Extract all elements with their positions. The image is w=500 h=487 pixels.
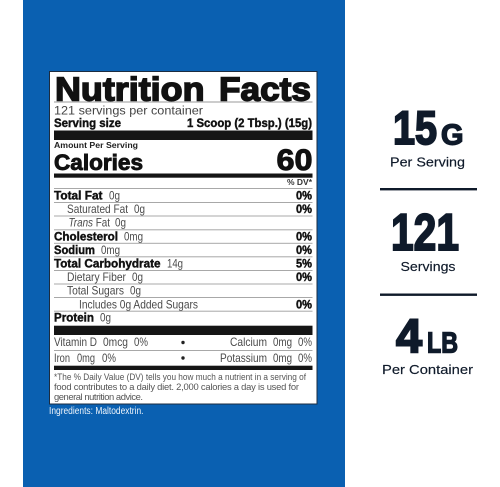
vitamins and minerals: 0mg bbox=[273, 335, 292, 349]
serving size: Serving size bbox=[54, 117, 122, 130]
vitamins and minerals: Potassium bbox=[220, 351, 267, 365]
vitamins and minerals: Iron bbox=[54, 351, 70, 365]
nutrient rows: 5% bbox=[296, 258, 312, 271]
vitamins and minerals: Vitamin D bbox=[54, 335, 97, 349]
nutrient rows: 0% bbox=[296, 230, 312, 243]
vitamins and minerals: 0% bbox=[102, 351, 116, 365]
footnote: *The % Daily Value (DV) tells you how much a nutrient in a serving of bbox=[54, 371, 306, 382]
vitamins and minerals: 0mcg bbox=[103, 335, 128, 349]
panel: nutrition facts label bbox=[50, 70, 317, 404]
calories: 60 bbox=[276, 144, 312, 177]
heading: Nutrition Facts: Nutrition bbox=[55, 70, 204, 108]
stat: 15g per serving: 15 bbox=[393, 101, 437, 154]
vitamins and minerals: 0% bbox=[134, 335, 148, 349]
amount per serving: Amount Per Serving bbox=[54, 141, 138, 150]
stat: 4lb per container: 4 bbox=[396, 309, 422, 362]
calories bbox=[54, 144, 312, 177]
serving size bbox=[54, 117, 312, 130]
vitamins and minerals: 0mg bbox=[77, 351, 95, 365]
nutrient rows: 0g bbox=[109, 188, 120, 202]
stat: 4lb per container bbox=[382, 309, 473, 377]
vitamins and minerals: Calcium bbox=[230, 335, 267, 349]
divider line bbox=[380, 294, 477, 296]
stat: 15g per serving bbox=[390, 101, 465, 170]
servings per container: 121 servings per container bbox=[54, 104, 203, 118]
nutrient rows: 0% bbox=[296, 203, 312, 216]
vitamins and minerals: 0% bbox=[298, 351, 312, 365]
footnote: general nutrition advice. bbox=[54, 391, 143, 402]
heading: Nutrition Facts bbox=[55, 70, 311, 108]
percent daily value header: % DV* bbox=[287, 178, 313, 187]
nutrient rows: 0g bbox=[100, 311, 111, 325]
stat: 121 servings: Servings bbox=[400, 260, 456, 274]
nutrient rows: 14g bbox=[167, 257, 183, 271]
stat: 121 servings: 121 bbox=[391, 204, 459, 262]
nutrient rows: 0mg bbox=[124, 229, 143, 243]
calories: Calories bbox=[54, 150, 143, 175]
nutrient rows: 0% bbox=[296, 244, 312, 257]
divider line bbox=[380, 188, 477, 190]
vitamins and minerals: 0mg bbox=[273, 351, 292, 365]
footnote: food contributes to a daily diet. 2,000 calories a day is used for bbox=[54, 381, 299, 392]
stat: 15g per serving: G bbox=[441, 119, 464, 151]
serving size: 1 Scoop (2 Tbsp.) (15g) bbox=[187, 117, 312, 130]
nutrient rows bbox=[54, 188, 312, 325]
stat: 4lb per container: LB bbox=[427, 327, 458, 359]
nutrient rows: 0% bbox=[296, 298, 312, 311]
nutrient rows: 0% bbox=[296, 189, 312, 202]
nutrient rows: Total Carbohydrate bbox=[54, 258, 161, 271]
nutrient rows: 0g bbox=[115, 216, 126, 230]
nutrient rows: 0g bbox=[134, 202, 145, 216]
nutrient rows: 0% bbox=[296, 271, 312, 284]
nutrient rows: 0g bbox=[132, 270, 143, 284]
nutrient rows: Cholesterol bbox=[54, 230, 118, 243]
vitamins and minerals: 0% bbox=[298, 335, 312, 349]
heading: Nutrition Facts: Facts bbox=[219, 70, 311, 108]
vitamins and minerals bbox=[54, 335, 312, 365]
nutrient rows: Saturated Fat bbox=[67, 202, 129, 216]
nutrient rows: Protein bbox=[54, 312, 94, 325]
nutrient rows: Dietary Fiber bbox=[67, 270, 126, 284]
footnote bbox=[54, 371, 306, 402]
stat: 15g per serving: Per Serving bbox=[390, 156, 465, 170]
nutrient rows: 0g bbox=[130, 284, 141, 298]
ingredients: Ingredients: Maltodextrin. bbox=[49, 406, 144, 417]
nutrient rows: Total Sugars bbox=[67, 284, 124, 298]
row dividers bbox=[54, 188, 312, 351]
blue background panel bbox=[23, 0, 345, 487]
stat: 121 servings bbox=[391, 204, 459, 274]
nutrient rows: Sodium bbox=[54, 244, 95, 257]
nutrient rows: Trans Fat bbox=[68, 216, 111, 230]
nutrient rows: Total Fat bbox=[54, 189, 103, 202]
nutrient rows: Includes 0g Added Sugars bbox=[79, 297, 198, 311]
stat: 4lb per container: Per Container bbox=[382, 363, 473, 377]
nutrient rows: 0mg bbox=[101, 243, 120, 257]
